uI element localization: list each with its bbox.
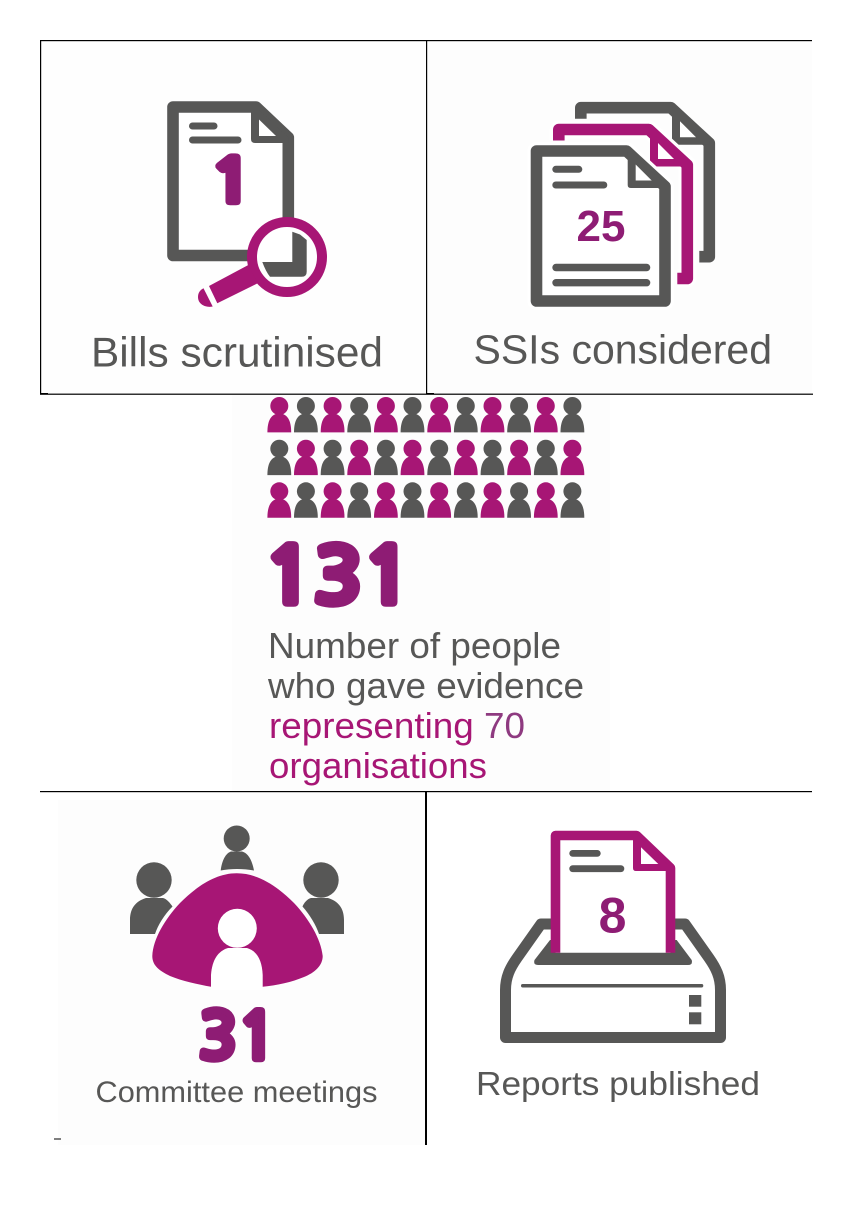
text: representing 70 organisations bbox=[269, 705, 525, 786]
panel: Reports published bbox=[476, 836, 760, 1102]
icon: document with magnifier bbox=[173, 107, 322, 307]
icon grid: people row 2 bbox=[267, 440, 584, 475]
icon: printer with document bbox=[506, 836, 720, 1038]
label: SSIs considered: SSIs considered bbox=[474, 326, 772, 372]
text: number of people who gave evidence bbox=[267, 625, 584, 706]
number: 8: 8 bbox=[599, 888, 626, 944]
icon grid: people row 1 bbox=[267, 397, 584, 432]
icon: people around a table bbox=[130, 826, 344, 990]
number: 1: 1 bbox=[210, 152, 253, 211]
number: 25: 25 bbox=[577, 202, 625, 251]
text: representing 70 organisations: representing 70 bbox=[269, 705, 525, 746]
number: 131: 131 bbox=[264, 540, 412, 615]
text: representing 70 organisations: organisations bbox=[269, 745, 487, 786]
label: Reports published: Reports published bbox=[476, 1065, 760, 1102]
icon: stack of documents bbox=[536, 108, 709, 301]
icon grid: people row 3 bbox=[267, 482, 584, 518]
panel: Committee meetings bbox=[96, 826, 378, 1109]
text: number of people who gave evidence: who gave evidence bbox=[267, 665, 584, 706]
label: Bills scrutinised: Bills scrutinised bbox=[91, 328, 383, 376]
label: Committee meetings: Committee meetings bbox=[96, 1076, 378, 1109]
panel: SSIs considered bbox=[474, 108, 772, 372]
panel: Bills scrutinised bbox=[91, 107, 383, 376]
panel: people who gave evidence bbox=[264, 397, 584, 786]
text: number of people who gave evidence: Number of people bbox=[268, 625, 561, 666]
number: 31: 31 bbox=[198, 1005, 276, 1069]
